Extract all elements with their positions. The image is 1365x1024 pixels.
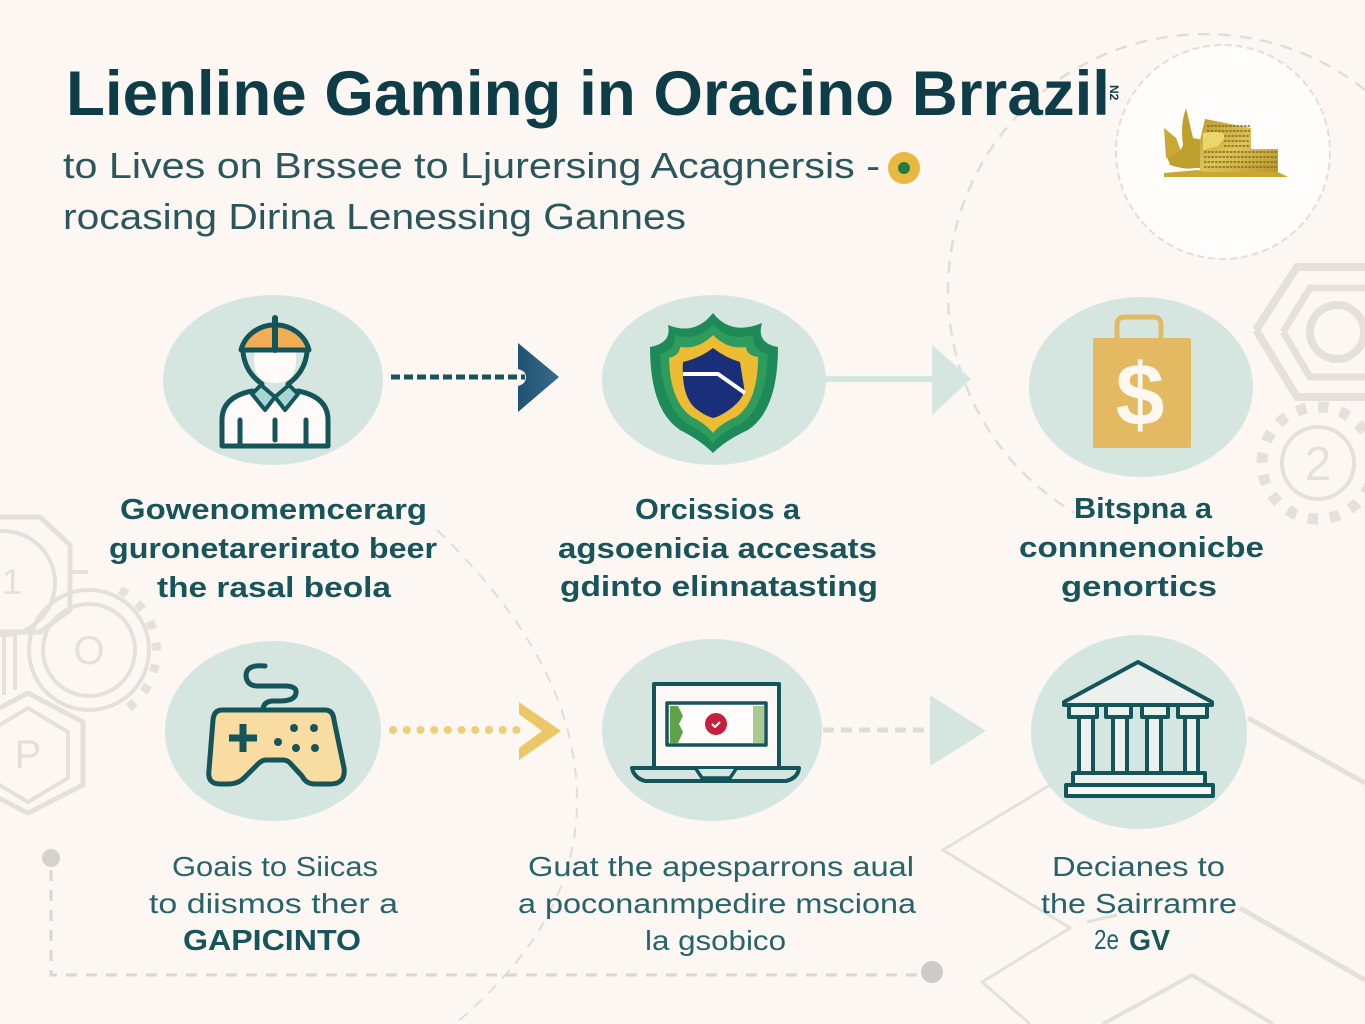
- panel: step 5: [518, 639, 916, 956]
- subtitle: to Lives on Brssee to Ljurersing Acagnersis -: [63, 145, 880, 186]
- label: step 6: [1041, 851, 1237, 957]
- panel: step 2: [558, 295, 878, 603]
- icon: worker: [222, 318, 328, 446]
- emblem: golden building: [1116, 45, 1330, 259]
- label: step 5: [518, 851, 916, 956]
- icon: game controller: [209, 666, 344, 784]
- background pattern: 2: [1305, 438, 1331, 491]
- label: step 6: GV: [1129, 925, 1171, 957]
- label: step 6: the Sairramre: [1041, 888, 1237, 919]
- arrow: step 2 to 3: [826, 345, 971, 415]
- icon: money bag: [1093, 317, 1191, 448]
- title mark: N2: [1107, 85, 1121, 101]
- label: step 6: 2e: [1094, 924, 1119, 955]
- panel: step 1: [109, 295, 437, 604]
- panel: step 4: [149, 641, 399, 957]
- icon: temple: [1064, 662, 1213, 796]
- label: step 3: [1019, 493, 1264, 603]
- label: step 5: Guat the apesparrons aual: [528, 851, 914, 882]
- label: step 3: connnenonicbe: [1019, 532, 1264, 564]
- icon: laptop: [632, 684, 799, 781]
- label: step 4: GAPICINTO: [183, 925, 361, 957]
- label: step 2: agsoenicia accesats: [558, 533, 877, 565]
- label: step 3: genortics: [1061, 571, 1217, 603]
- icon: money bag: $: [1116, 345, 1164, 444]
- label: step 4: [149, 851, 399, 957]
- label: step 4: to diismos ther a: [149, 888, 399, 919]
- label: step 2: [558, 494, 878, 603]
- title: Lienline Gaming in Oracino Brrazil: [66, 59, 1110, 129]
- panel: step 3: [1019, 297, 1264, 603]
- label: step 2: gdinto elinnatasting: [560, 571, 878, 603]
- label: step 6: Decianes to: [1052, 851, 1225, 882]
- icon: shield: [650, 313, 778, 453]
- subtitle: [63, 145, 880, 237]
- label: step 1: the rasal beola: [157, 572, 392, 604]
- background pattern: 1: [2, 561, 22, 602]
- label: step 5: a poconanmpedire msciona: [518, 888, 916, 919]
- panel: step 6: [1031, 635, 1247, 957]
- label: step 4: Goais to Siicas: [172, 851, 378, 882]
- background pattern: O: [73, 629, 105, 673]
- arrow: step 4 to 5: [393, 702, 561, 760]
- arrow: step 1 to 2: [391, 343, 559, 412]
- label: step 1: guronetarerirato beer: [109, 533, 437, 565]
- icon: subtitle dot: [888, 152, 920, 184]
- label: step 1: [109, 494, 437, 604]
- background pattern: P: [15, 733, 41, 777]
- label: step 3: Bitspna a: [1074, 493, 1213, 525]
- subtitle: rocasing Dirina Lenessing Gannes: [63, 196, 686, 237]
- label: step 2: Orcissios a: [635, 494, 801, 526]
- label: step 5: la gsobico: [645, 925, 786, 956]
- label: step 1: Gowenomemcerarg: [120, 494, 427, 526]
- arrow: step 5 to 6: [823, 695, 986, 766]
